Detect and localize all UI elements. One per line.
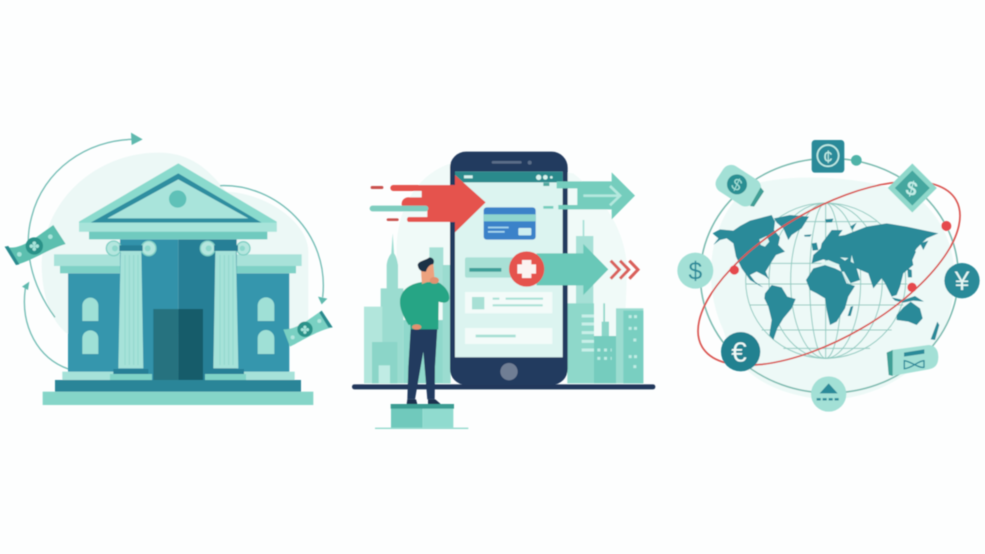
shoes bbox=[407, 399, 417, 404]
pediment roof bbox=[79, 163, 277, 239]
banknote left bbox=[5, 225, 66, 265]
teal arrow top right bbox=[543, 172, 635, 219]
small northern islands bbox=[804, 234, 812, 237]
neck and head bbox=[421, 264, 434, 284]
left column bbox=[106, 241, 156, 380]
banknote left: ✤ bbox=[29, 239, 39, 253]
red sea bbox=[842, 272, 851, 284]
base steps bbox=[43, 372, 313, 405]
australia bbox=[897, 302, 923, 325]
british isles bbox=[812, 243, 818, 251]
button card bbox=[465, 328, 552, 344]
home button bbox=[500, 363, 518, 380]
status icons bbox=[464, 175, 553, 180]
globe grid bbox=[746, 203, 907, 358]
panel: mobile banking bbox=[352, 152, 655, 429]
icon: cent tile bbox=[812, 140, 844, 173]
red nodes bbox=[730, 221, 951, 292]
door bbox=[153, 309, 203, 380]
greenland bbox=[774, 215, 809, 240]
red orbit bbox=[670, 145, 985, 402]
icon: dollar banknote tag bbox=[712, 161, 765, 210]
smartphone bbox=[450, 152, 568, 385]
legs bbox=[407, 328, 437, 399]
banknote right bbox=[283, 311, 333, 347]
background blob bbox=[42, 153, 308, 333]
red plus badge bbox=[509, 251, 544, 287]
icon: dollar coin: $ bbox=[688, 258, 702, 285]
eurasia bbox=[812, 223, 938, 297]
background blob bbox=[397, 160, 627, 373]
wings bbox=[54, 254, 302, 372]
lake and arctic inlet bbox=[851, 255, 854, 263]
panel: bank building bbox=[5, 133, 333, 405]
central hall bbox=[120, 239, 237, 380]
arrowheads bbox=[22, 133, 327, 304]
background blob bbox=[711, 178, 954, 400]
africa bbox=[806, 265, 855, 325]
teal arrow mid right bbox=[537, 244, 608, 295]
torso bbox=[400, 282, 449, 329]
form row with bar bbox=[465, 257, 515, 278]
status bar bbox=[455, 172, 563, 182]
icon: euro coin: € bbox=[731, 337, 747, 368]
icon: dollar diamond bbox=[888, 163, 937, 213]
orbit ring bbox=[700, 158, 958, 393]
ground line bbox=[352, 384, 655, 389]
iceland bbox=[825, 219, 833, 223]
red chevrons bbox=[611, 261, 638, 279]
icon: dollar coin bbox=[677, 253, 713, 289]
red arrow bbox=[370, 175, 486, 232]
city left bbox=[364, 233, 451, 383]
circular arrows bbox=[24, 139, 323, 369]
indonesia and philippines bbox=[892, 296, 924, 303]
new zealand bbox=[931, 322, 939, 340]
hand at chin bbox=[430, 277, 439, 284]
banknote right: ✤ bbox=[301, 324, 310, 336]
person bbox=[400, 257, 449, 404]
icon: yen coin bbox=[944, 263, 980, 298]
speaker bbox=[492, 161, 522, 164]
madagascar bbox=[848, 306, 853, 316]
panel: global finance bbox=[670, 140, 985, 412]
south america bbox=[764, 285, 796, 340]
pedestal bbox=[375, 404, 468, 429]
icon: yen coin: ¥ bbox=[954, 266, 970, 296]
hand on hip bbox=[412, 324, 421, 330]
icon: bank coin bbox=[811, 376, 846, 412]
world map bbox=[713, 215, 939, 340]
list card bbox=[465, 292, 552, 313]
icon: ticket card bbox=[887, 345, 938, 376]
black sea and caspian bbox=[840, 257, 848, 261]
north america bbox=[713, 215, 785, 287]
windows bbox=[82, 297, 274, 354]
kamchatka bbox=[920, 241, 928, 250]
icon: dollar banknote tag: $ bbox=[729, 174, 745, 195]
right column bbox=[200, 241, 250, 380]
icon: dollar diamond: $ bbox=[903, 177, 920, 201]
map highlights bbox=[759, 236, 854, 284]
japan bbox=[904, 250, 916, 266]
teal node bbox=[851, 155, 862, 166]
screen bbox=[455, 172, 563, 357]
icon: euro coin bbox=[721, 332, 760, 371]
mediterranean bbox=[817, 260, 840, 267]
city right bbox=[567, 220, 643, 383]
hudson bay bbox=[759, 236, 769, 247]
credit card bbox=[484, 207, 536, 240]
hair bbox=[418, 257, 434, 272]
icon: cent tile: ¢ bbox=[823, 146, 833, 166]
